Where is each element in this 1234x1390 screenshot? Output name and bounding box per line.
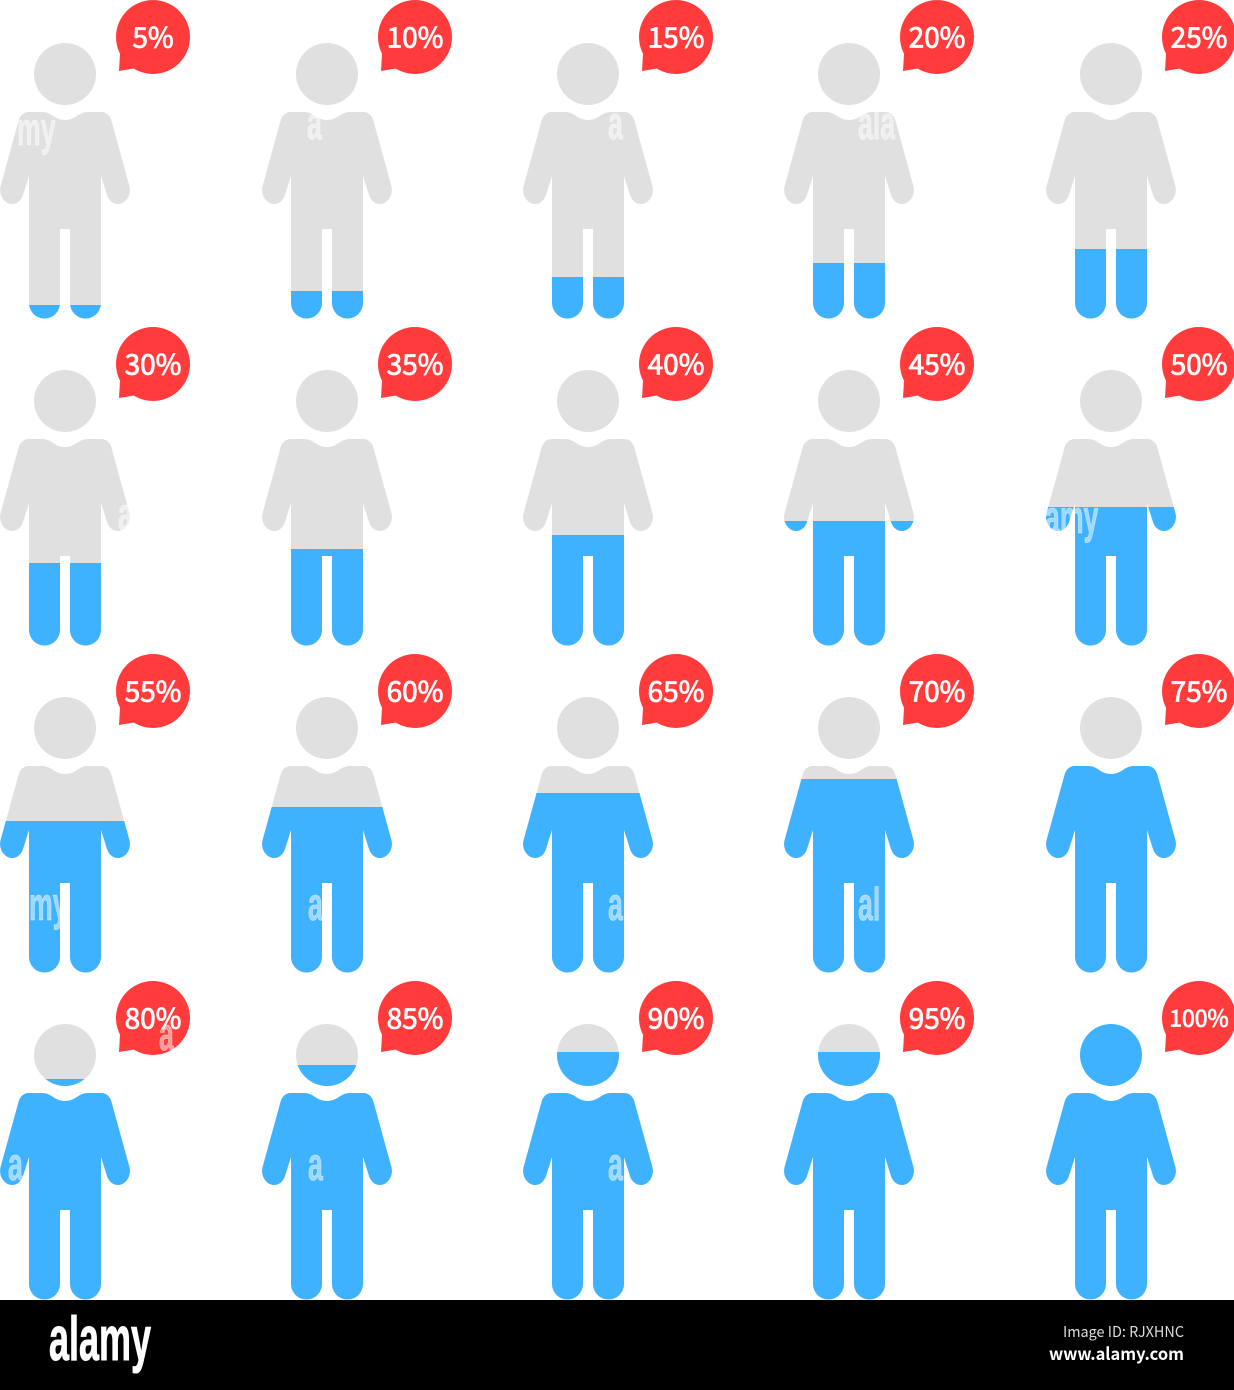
watermark fragments: a (608, 1138, 624, 1190)
person 45%: 45% (909, 344, 965, 384)
watermark fragments: a (159, 1008, 175, 1060)
person 95% (784, 981, 974, 1300)
person 50% (1046, 327, 1234, 646)
watermark fragments: my (29, 878, 68, 930)
watermark fragments: a (308, 878, 324, 930)
person 95%: 95% (909, 998, 965, 1038)
watermark fragments: a (308, 1138, 324, 1190)
person 15%: 15% (648, 16, 704, 56)
person 65%: 65% (648, 670, 704, 710)
watermark fragments: ala (858, 97, 896, 149)
person 20%: 20% (909, 16, 965, 56)
person 80% (0, 981, 190, 1300)
person 10%: 10% (387, 16, 443, 56)
person 75% (1046, 654, 1234, 972)
person 60%: 60% (387, 670, 443, 710)
watermark fragments: a (608, 878, 624, 930)
person 45% (784, 327, 974, 646)
person 5%: 5% (132, 16, 174, 56)
person 90%: 90% (648, 998, 704, 1038)
person 60% (262, 654, 452, 972)
image id: Image ID: RJXHNC (1063, 1321, 1184, 1342)
person 70% (784, 654, 974, 972)
watermark fragments: a (608, 97, 624, 149)
person 25%: 25% (1171, 16, 1227, 56)
person 55%: 55% (125, 670, 181, 710)
person 40% (523, 327, 713, 646)
person 70%: 70% (909, 670, 965, 710)
person 35%: 35% (387, 344, 443, 384)
person 85% (262, 981, 452, 1300)
watermark fragments: a (118, 488, 134, 540)
footer bar (0, 1300, 1234, 1390)
website: www.alamy.com (1049, 1340, 1184, 1365)
person 20% (784, 0, 974, 318)
person 90% (523, 981, 713, 1300)
person 80%: 80% (125, 998, 181, 1038)
person 55% (0, 654, 190, 972)
watermark fragments: a (307, 97, 323, 149)
person 15% (523, 0, 713, 318)
person 75%: 75% (1171, 670, 1227, 710)
person 65% (523, 654, 713, 972)
watermark fragments: al (858, 878, 880, 930)
person 85%: 85% (387, 998, 443, 1038)
person 100%: 100% (1169, 1000, 1229, 1034)
alamy logo: alamy (49, 1305, 151, 1374)
person 30% (0, 327, 190, 646)
watermark fragments: a (8, 1138, 24, 1190)
watermark fragments: amy (1045, 491, 1098, 543)
person 10% (262, 0, 452, 318)
person 40%: 40% (648, 344, 704, 384)
person 30%: 30% (125, 344, 181, 384)
person 25% (1046, 0, 1234, 318)
watermark fragments: my (17, 103, 56, 155)
person 35% (262, 327, 452, 646)
person 100% (1046, 981, 1234, 1300)
person 5% (0, 0, 190, 318)
person 50%: 50% (1171, 344, 1227, 384)
watermark fragments (8, 97, 1098, 1190)
